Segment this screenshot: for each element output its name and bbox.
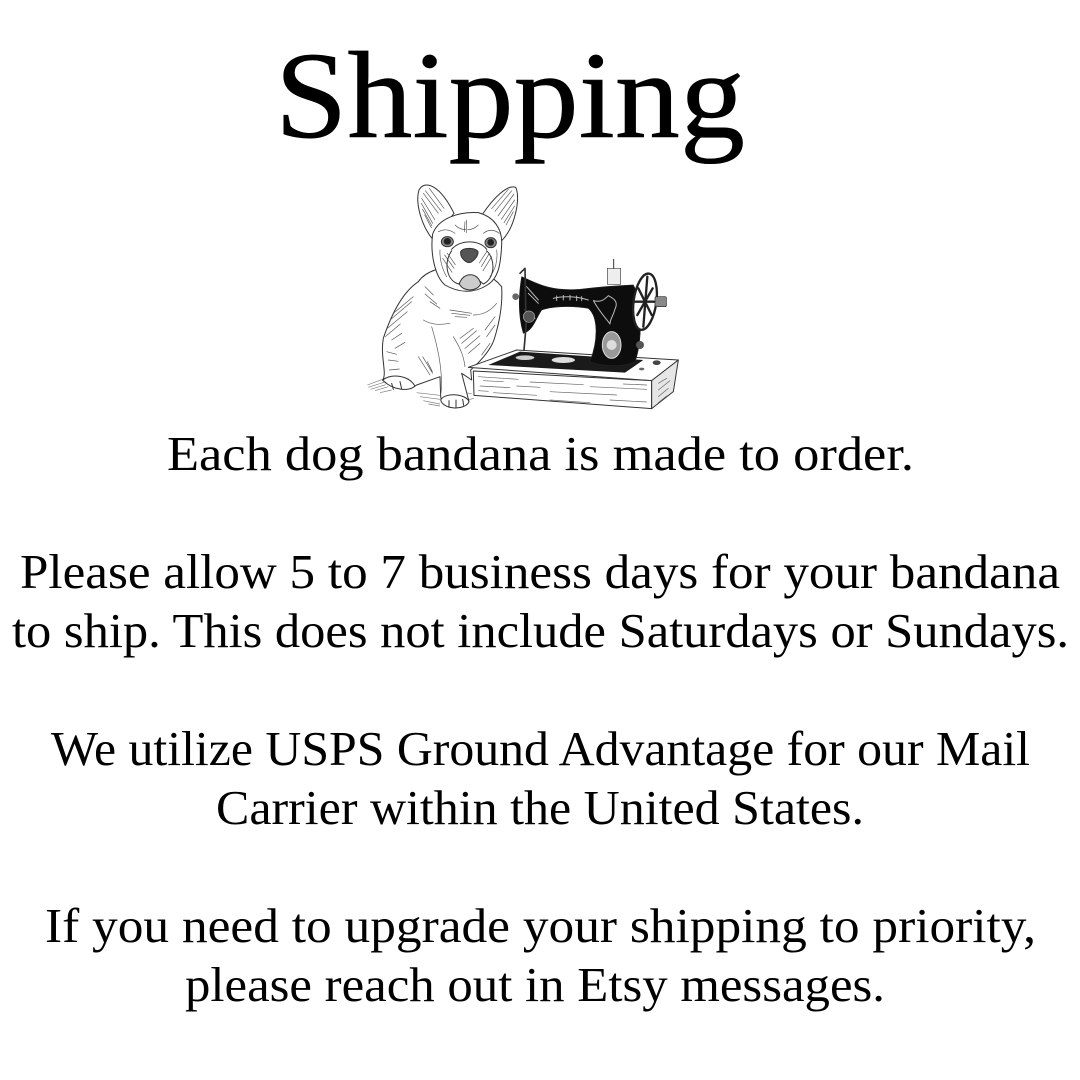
- wooden base: [468, 350, 678, 381]
- text block: mail carrier: We utilize USPS Ground Advantage for our Mail: [51, 721, 1030, 776]
- text block: processing time: to ship. This does not include Saturdays or Sundays.: [12, 603, 1069, 658]
- dog muzzle: [452, 242, 487, 249]
- text block: mail carrier: Carrier within the United States.: [216, 780, 864, 835]
- text block: shipping upgrade: please reach out in Etsy messages.: [185, 957, 885, 1012]
- icon: sewing machine: [468, 259, 678, 409]
- machine arm: [519, 277, 640, 366]
- ear hatching: [421, 188, 515, 228]
- ground shadow: [367, 379, 474, 406]
- dog nose: [461, 248, 478, 263]
- dog fold and fur shading: [385, 220, 499, 393]
- dog head: [432, 213, 502, 291]
- dog mouth: [459, 275, 481, 290]
- handwheel: [630, 272, 660, 331]
- text block: mail carrier: [51, 721, 1030, 835]
- dog eyes: [441, 237, 453, 247]
- dog body: [382, 267, 502, 407]
- text block: processing time: [12, 544, 1069, 658]
- needle bar: [520, 268, 526, 350]
- text block: processing time: Please allow 5 to 7 business days for your bandana: [20, 544, 1060, 599]
- medallion: [602, 332, 621, 358]
- arm decoration: [525, 287, 616, 324]
- text block: shipping upgrade: [45, 898, 1036, 1012]
- thread spool: [607, 268, 621, 284]
- text block: shipping upgrade: If you need to upgrade your shipping to priority,: [45, 898, 1036, 953]
- wood grain: [478, 377, 670, 403]
- bed plate: [488, 352, 643, 373]
- dog ears: [418, 185, 454, 240]
- icon: dog: [382, 185, 518, 408]
- title: Shipping: [275, 27, 745, 164]
- illustration: French bulldog beside a sewing machine: [367, 184, 679, 410]
- text block: made to order: Each dog bandana is made to order.: [167, 426, 914, 481]
- dog paws: [383, 376, 415, 389]
